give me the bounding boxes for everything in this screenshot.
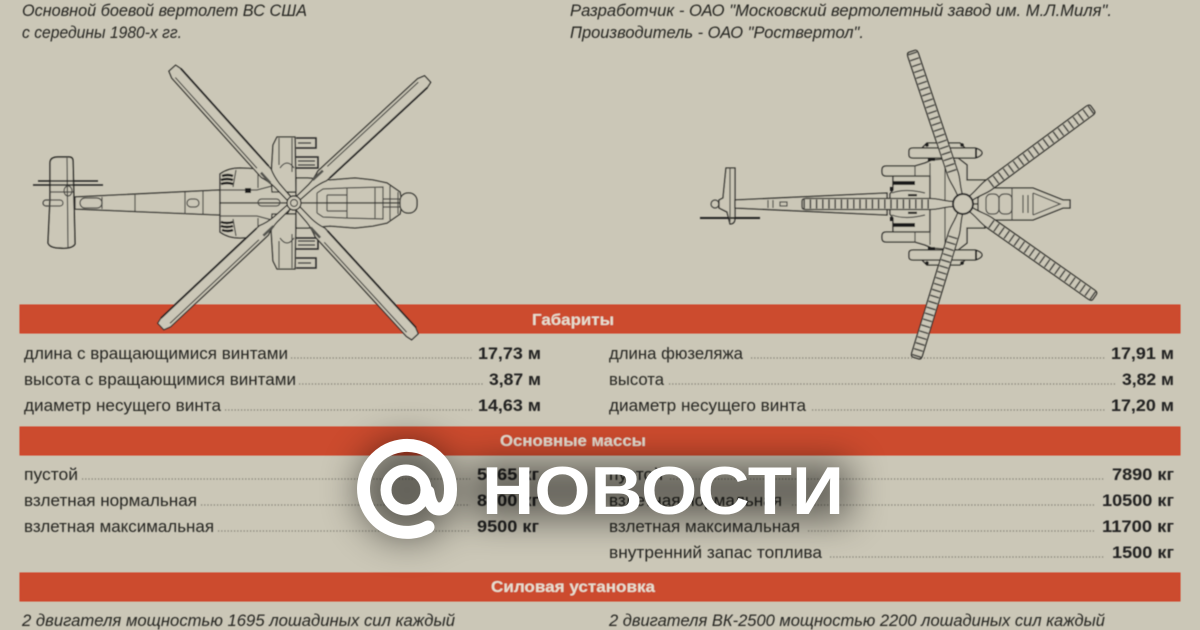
rotor blade SE (292, 203, 420, 341)
lower mirror of fuselage (220, 203, 403, 269)
dimensions table: left (24, 344, 541, 415)
dimensions table: right (609, 344, 1174, 415)
dimensions table: right: высота (609, 370, 665, 389)
fuselage lower half (882, 204, 985, 265)
rear fuselage and wings, upper (220, 137, 403, 203)
dimensions table: left: длина с вращающимися винтами (24, 344, 288, 363)
dimensions table: right: 17,20 м (1111, 396, 1174, 415)
section bar: Габариты: Габариты (532, 312, 614, 329)
masses table: right (609, 465, 1174, 562)
dimensions table: right: 3,82 м (1122, 370, 1174, 389)
dimensions table: right: диаметр несущего винта (609, 396, 807, 415)
dimensions table: left: 3,87 м (489, 370, 541, 389)
fuselage upper half (882, 143, 985, 204)
masses table: right: взлетная нормальная (609, 491, 782, 510)
masses table: left: взлетная нормальная (24, 491, 197, 510)
engines: right: 2 двигателя ВК-2500 мощностью 2200 лошадиных сил каждый (608, 611, 1106, 630)
masses table: left: 8000 кг (477, 491, 539, 510)
rotor blade NW (167, 64, 294, 203)
section bar: Основные массы: Основные массы (500, 433, 646, 450)
tail stabilizer (33, 157, 103, 248)
logo shadow (357, 440, 850, 540)
masses table: right: пустой (609, 465, 663, 484)
rotor blade NE (293, 74, 432, 204)
masses table: right: 7890 кг (1112, 465, 1174, 484)
engine mark (245, 188, 251, 193)
masses table: left (24, 465, 539, 536)
rotor blade SW (157, 202, 293, 332)
helicopter: Mi-28 top view (700, 50, 1098, 360)
nose sensor (400, 193, 417, 213)
masses table: left: 5165 кг (477, 465, 539, 484)
icon: at sign (364, 445, 451, 532)
helicopter: Apache top view (33, 64, 432, 341)
masses table: right: 1500 кг (1112, 543, 1174, 562)
right caption (570, 1, 1112, 42)
cockpit (978, 188, 1070, 220)
rotor blade NE (966, 104, 1096, 204)
masses table: right: 10500 кг (1102, 491, 1174, 510)
dimensions table: left: диаметр несущего винта (24, 396, 222, 415)
left caption: с середины 1980-х гг. (22, 23, 182, 42)
dimensions table: left: высота с вращающимися винтами (24, 370, 296, 389)
rotor hub (287, 196, 301, 210)
dimensions table: right: длина фюзеляжа (609, 344, 744, 363)
tail boom (735, 193, 887, 215)
masses table: left: взлетная максимальная (24, 517, 214, 536)
dimensions table: right: 17,91 м (1111, 344, 1174, 363)
right caption: Разработчик - ОАО "Московский вертолетный завод им. М.Л.Миля". (570, 1, 1112, 20)
dimensions table: left: 14,63 м (478, 396, 541, 415)
right caption: Производитель - ОАО "Роствертол". (570, 23, 864, 42)
rotor blade W (802, 198, 955, 210)
tail fin and tail rotor (700, 168, 760, 224)
rotor blade SE (966, 204, 1098, 301)
section bar: Силовая установка: Силовая установка (491, 579, 655, 596)
rotor blade N (907, 50, 966, 198)
left caption (22, 1, 307, 42)
left caption: Основной боевой вертолет ВС США (22, 1, 307, 20)
section bar: Основные массы (20, 427, 1180, 455)
rotor hub (953, 194, 973, 214)
section bar: Силовая установка (20, 573, 1180, 601)
masses table: right: внутренний запас топлива (609, 543, 823, 562)
logo: @ НОВОСТИ (364, 445, 844, 532)
dimensions table: left: 17,73 м (478, 344, 541, 363)
masses table: right: 11700 кг (1102, 517, 1174, 536)
masses table: left: 9500 кг (477, 517, 539, 536)
logo wordmark: НОВОСТИ (482, 453, 844, 529)
rotor blade S (911, 210, 966, 360)
tail boom (75, 190, 220, 215)
centre capsule (258, 199, 280, 206)
masses table: right: взлетная максимальная (609, 517, 800, 536)
section bar: Габариты (20, 305, 1180, 333)
masses table: left: пустой (24, 465, 78, 484)
engines: left: 2 двигателя мощностью 1695 лошадиных сил каждый (21, 611, 456, 630)
